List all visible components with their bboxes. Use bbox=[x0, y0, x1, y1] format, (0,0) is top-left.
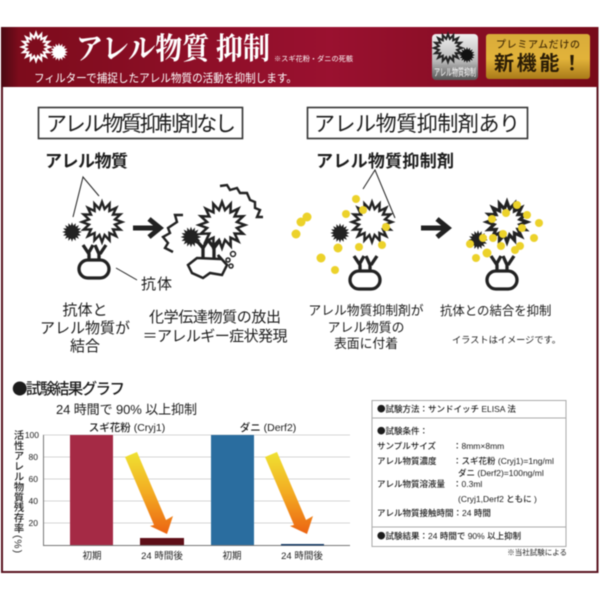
caption: binding: アレル物質が bbox=[40, 319, 130, 337]
heading box bbox=[38, 108, 242, 138]
heading box: アレル物質抑制剤あり bbox=[314, 113, 520, 136]
heading: ●試験結果グラフ bbox=[12, 377, 125, 399]
label: antibody: 抗体 bbox=[141, 276, 172, 293]
label: suppressant: アレル物質抑制剤 bbox=[316, 152, 454, 171]
y-axis title: (%) bbox=[12, 535, 22, 554]
header banner bbox=[1, 24, 598, 87]
icon: large allergen with dots bbox=[292, 195, 392, 274]
test conditions text: ：8mm×8mm bbox=[453, 441, 504, 451]
footnote: ※当社試験による bbox=[507, 547, 567, 557]
test conditions text: アレル物質溶液量 bbox=[377, 479, 446, 489]
panel: without suppressant bbox=[38, 108, 288, 355]
test conditions text: ●試験方法：サンドイッチ ELISA 法 bbox=[377, 403, 516, 415]
caption: binding: 結合 bbox=[70, 338, 100, 355]
bar chart: 24 時間後 bbox=[281, 550, 323, 562]
bar chart: 24 時間後 bbox=[141, 550, 183, 562]
icon: released mediator squiggle top bbox=[220, 185, 263, 217]
icon: antibody bbox=[487, 256, 517, 289]
test conditions text: アレル物質接触時間：24 時間 bbox=[377, 508, 491, 518]
bar chart: 100 bbox=[25, 430, 39, 440]
callout lines bbox=[363, 170, 395, 218]
icon: coated allergen bbox=[466, 201, 543, 262]
bar chart: 初期 bbox=[222, 550, 242, 562]
bar chart: 20 bbox=[29, 518, 38, 528]
header note: ※スギ花粉・ダニの死骸 bbox=[274, 54, 353, 63]
arrow: cedar decrease bbox=[125, 452, 173, 534]
caption: suppress binding: 抗体との結合を抑制 bbox=[440, 304, 551, 318]
caption: binding: 抗体と bbox=[62, 302, 108, 319]
header subtitle: フィルターで捕捉したアレル物質の活動を抑制します。 bbox=[34, 71, 297, 85]
badge: premium new feature bbox=[486, 34, 590, 79]
test conditions text: ：0.3ml bbox=[453, 479, 482, 489]
caption: adhesion: アレル物質抑制剤が bbox=[308, 303, 424, 318]
test conditions text: ●試験結果：24 時間で 90% 以上抑制 bbox=[377, 530, 521, 542]
arrow bbox=[421, 219, 448, 237]
caption: adhesion: アレル物質の bbox=[328, 320, 404, 335]
icon badge: allergen suppression: アレル物質抑制 bbox=[434, 66, 476, 79]
y-axis title: 活性アレル物質残存率 bbox=[12, 429, 24, 534]
icon: header allergen stars bbox=[22, 33, 68, 61]
arrow bbox=[133, 219, 160, 237]
bar chart: 60 bbox=[29, 474, 38, 484]
chart subtitle: 24 時間で 90% 以上抑制 bbox=[56, 402, 197, 417]
label: allergen: アレル物質 bbox=[45, 152, 128, 171]
panel: result graph bbox=[12, 377, 350, 562]
bar chart: 80 bbox=[29, 452, 38, 462]
badge: premium new feature: 新機能！ bbox=[494, 52, 582, 75]
panel: with suppressant bbox=[292, 108, 561, 351]
heading: アレル物質 抑制 bbox=[76, 24, 270, 68]
icon badge: allergen suppression bbox=[432, 34, 478, 80]
note: illustration: イラストはイメージです。 bbox=[452, 335, 561, 345]
bar chart: 初期 bbox=[82, 550, 102, 562]
caption: adhesion: 表面に付着 bbox=[334, 336, 398, 351]
caption: release: ＝アレルギー症状発現 bbox=[142, 328, 288, 345]
panel: test conditions bbox=[372, 400, 567, 557]
test conditions text: サンプルサイズ bbox=[377, 441, 436, 451]
test conditions text: ●試験条件： bbox=[377, 425, 428, 437]
caption: release: 化学伝達物質の放出 bbox=[149, 308, 281, 326]
test conditions text: ダニ (Derf2)=100ng/ml bbox=[458, 468, 544, 478]
icon: antibody bbox=[350, 256, 380, 289]
series label: mite: ダニ (Derf2) bbox=[240, 421, 296, 434]
bar chart: 40 bbox=[29, 496, 38, 506]
series label: cedar pollen: スギ花粉 (Cryj1) bbox=[89, 421, 165, 434]
icon: antibody bbox=[79, 245, 109, 278]
badge: premium new feature: プレミアムだけの bbox=[496, 39, 580, 51]
callout lines bbox=[73, 177, 99, 217]
test conditions text: ：スギ花粉 (Cryj1)=1ng/ml bbox=[453, 456, 554, 466]
test conditions text: (Cryj1,Derf2 ともに ) bbox=[458, 494, 537, 504]
heading box bbox=[308, 108, 528, 138]
icon: bound allergen and antibody bbox=[182, 202, 245, 278]
bar chart bbox=[25, 430, 350, 562]
icon: released mediator squiggle bbox=[163, 215, 183, 252]
heading box: アレル物質抑制剤なし bbox=[46, 113, 236, 136]
test conditions text bbox=[377, 403, 554, 542]
antibody leader line bbox=[116, 268, 137, 280]
icon: small allergen bbox=[64, 224, 80, 240]
test conditions text: アレル物質濃度 bbox=[377, 456, 437, 466]
icon: large allergen bbox=[82, 202, 122, 242]
arrow: mite decrease bbox=[265, 452, 313, 534]
